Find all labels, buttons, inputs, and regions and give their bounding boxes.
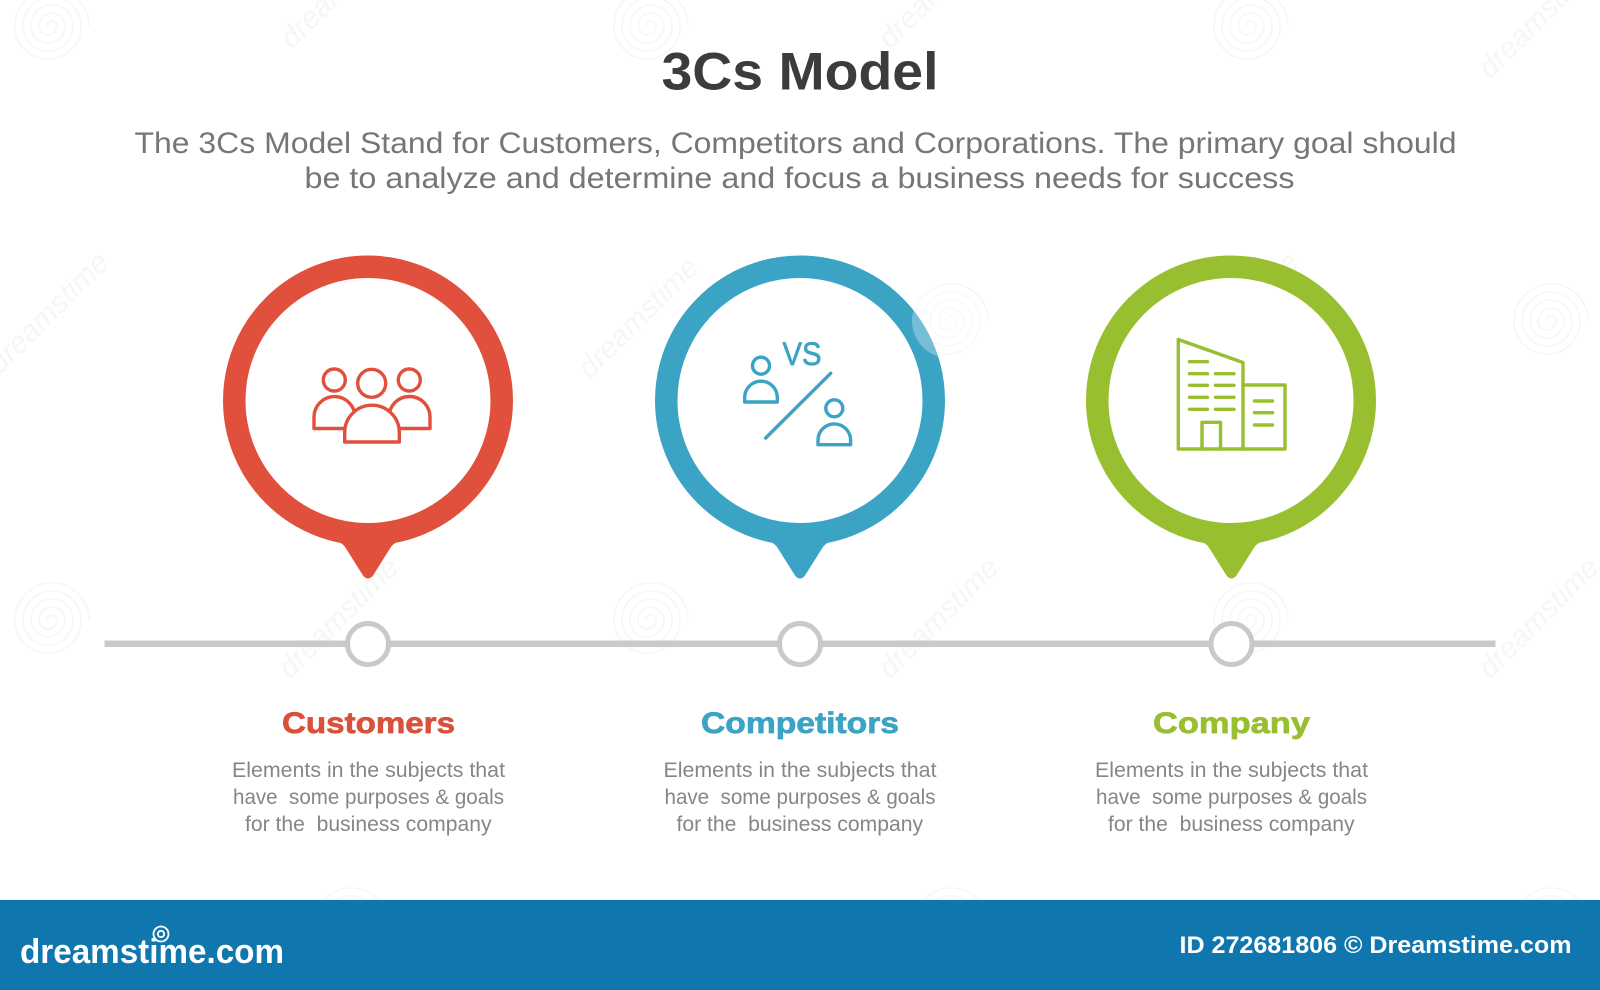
icon: building: [1178, 340, 1285, 449]
title: 3Cs Model: [662, 42, 938, 102]
text block: customers: Customers: [282, 707, 455, 740]
logo text: dreamstime.com: [20, 933, 284, 971]
subtitle: [134, 127, 1456, 195]
subtitle: be to analyze and determine and focus a business needs for success: [304, 162, 1294, 195]
watermark disc over ring: [912, 284, 986, 358]
node: company: [1211, 624, 1252, 664]
node: customers: [348, 624, 388, 664]
text block: company: for the business company: [1108, 812, 1355, 836]
text block: company: Company: [1153, 707, 1310, 740]
image id: ID 272681806 © Dreamstime.com: [1180, 932, 1572, 959]
node: competitors: [780, 624, 820, 664]
text block: competitors: for the business company: [676, 812, 923, 836]
subtitle: The 3Cs Model Stand for Customers, Competitors and Corporations. The primary goal should: [134, 127, 1456, 160]
text block: competitors: have some purposes & goals: [664, 785, 936, 809]
timeline: [104, 624, 1496, 664]
text block: customers: Elements in the subjects that: [232, 758, 505, 782]
footer bar: [0, 900, 1600, 990]
text block: company: Elements in the subjects that: [1095, 758, 1368, 782]
text block: company: [1095, 707, 1368, 836]
pin: customers: [234, 267, 502, 578]
logo spiral: [154, 926, 168, 942]
background watermark: dreamstime: [1172, 246, 1306, 380]
background watermark: dreamstime: [572, 251, 706, 385]
pin: competitors: [666, 267, 934, 578]
text block: competitors: Competitors: [701, 707, 899, 740]
icon: versus: [745, 336, 851, 445]
background watermark: dreamstime: [872, 551, 1006, 685]
text block: competitors: Elements in the subjects that: [664, 758, 937, 782]
text block: customers: [232, 707, 505, 836]
text block: customers: for the business company: [245, 812, 492, 836]
text block: customers: have some purposes & goals: [233, 785, 504, 809]
icon: versus: VS: [782, 336, 822, 372]
pin: company: [1097, 267, 1365, 578]
icon: customers group: [314, 369, 430, 442]
text block: company: have some purposes & goals: [1096, 785, 1367, 809]
text block: competitors: [664, 707, 937, 836]
background watermark: dreamstime: [272, 551, 406, 685]
